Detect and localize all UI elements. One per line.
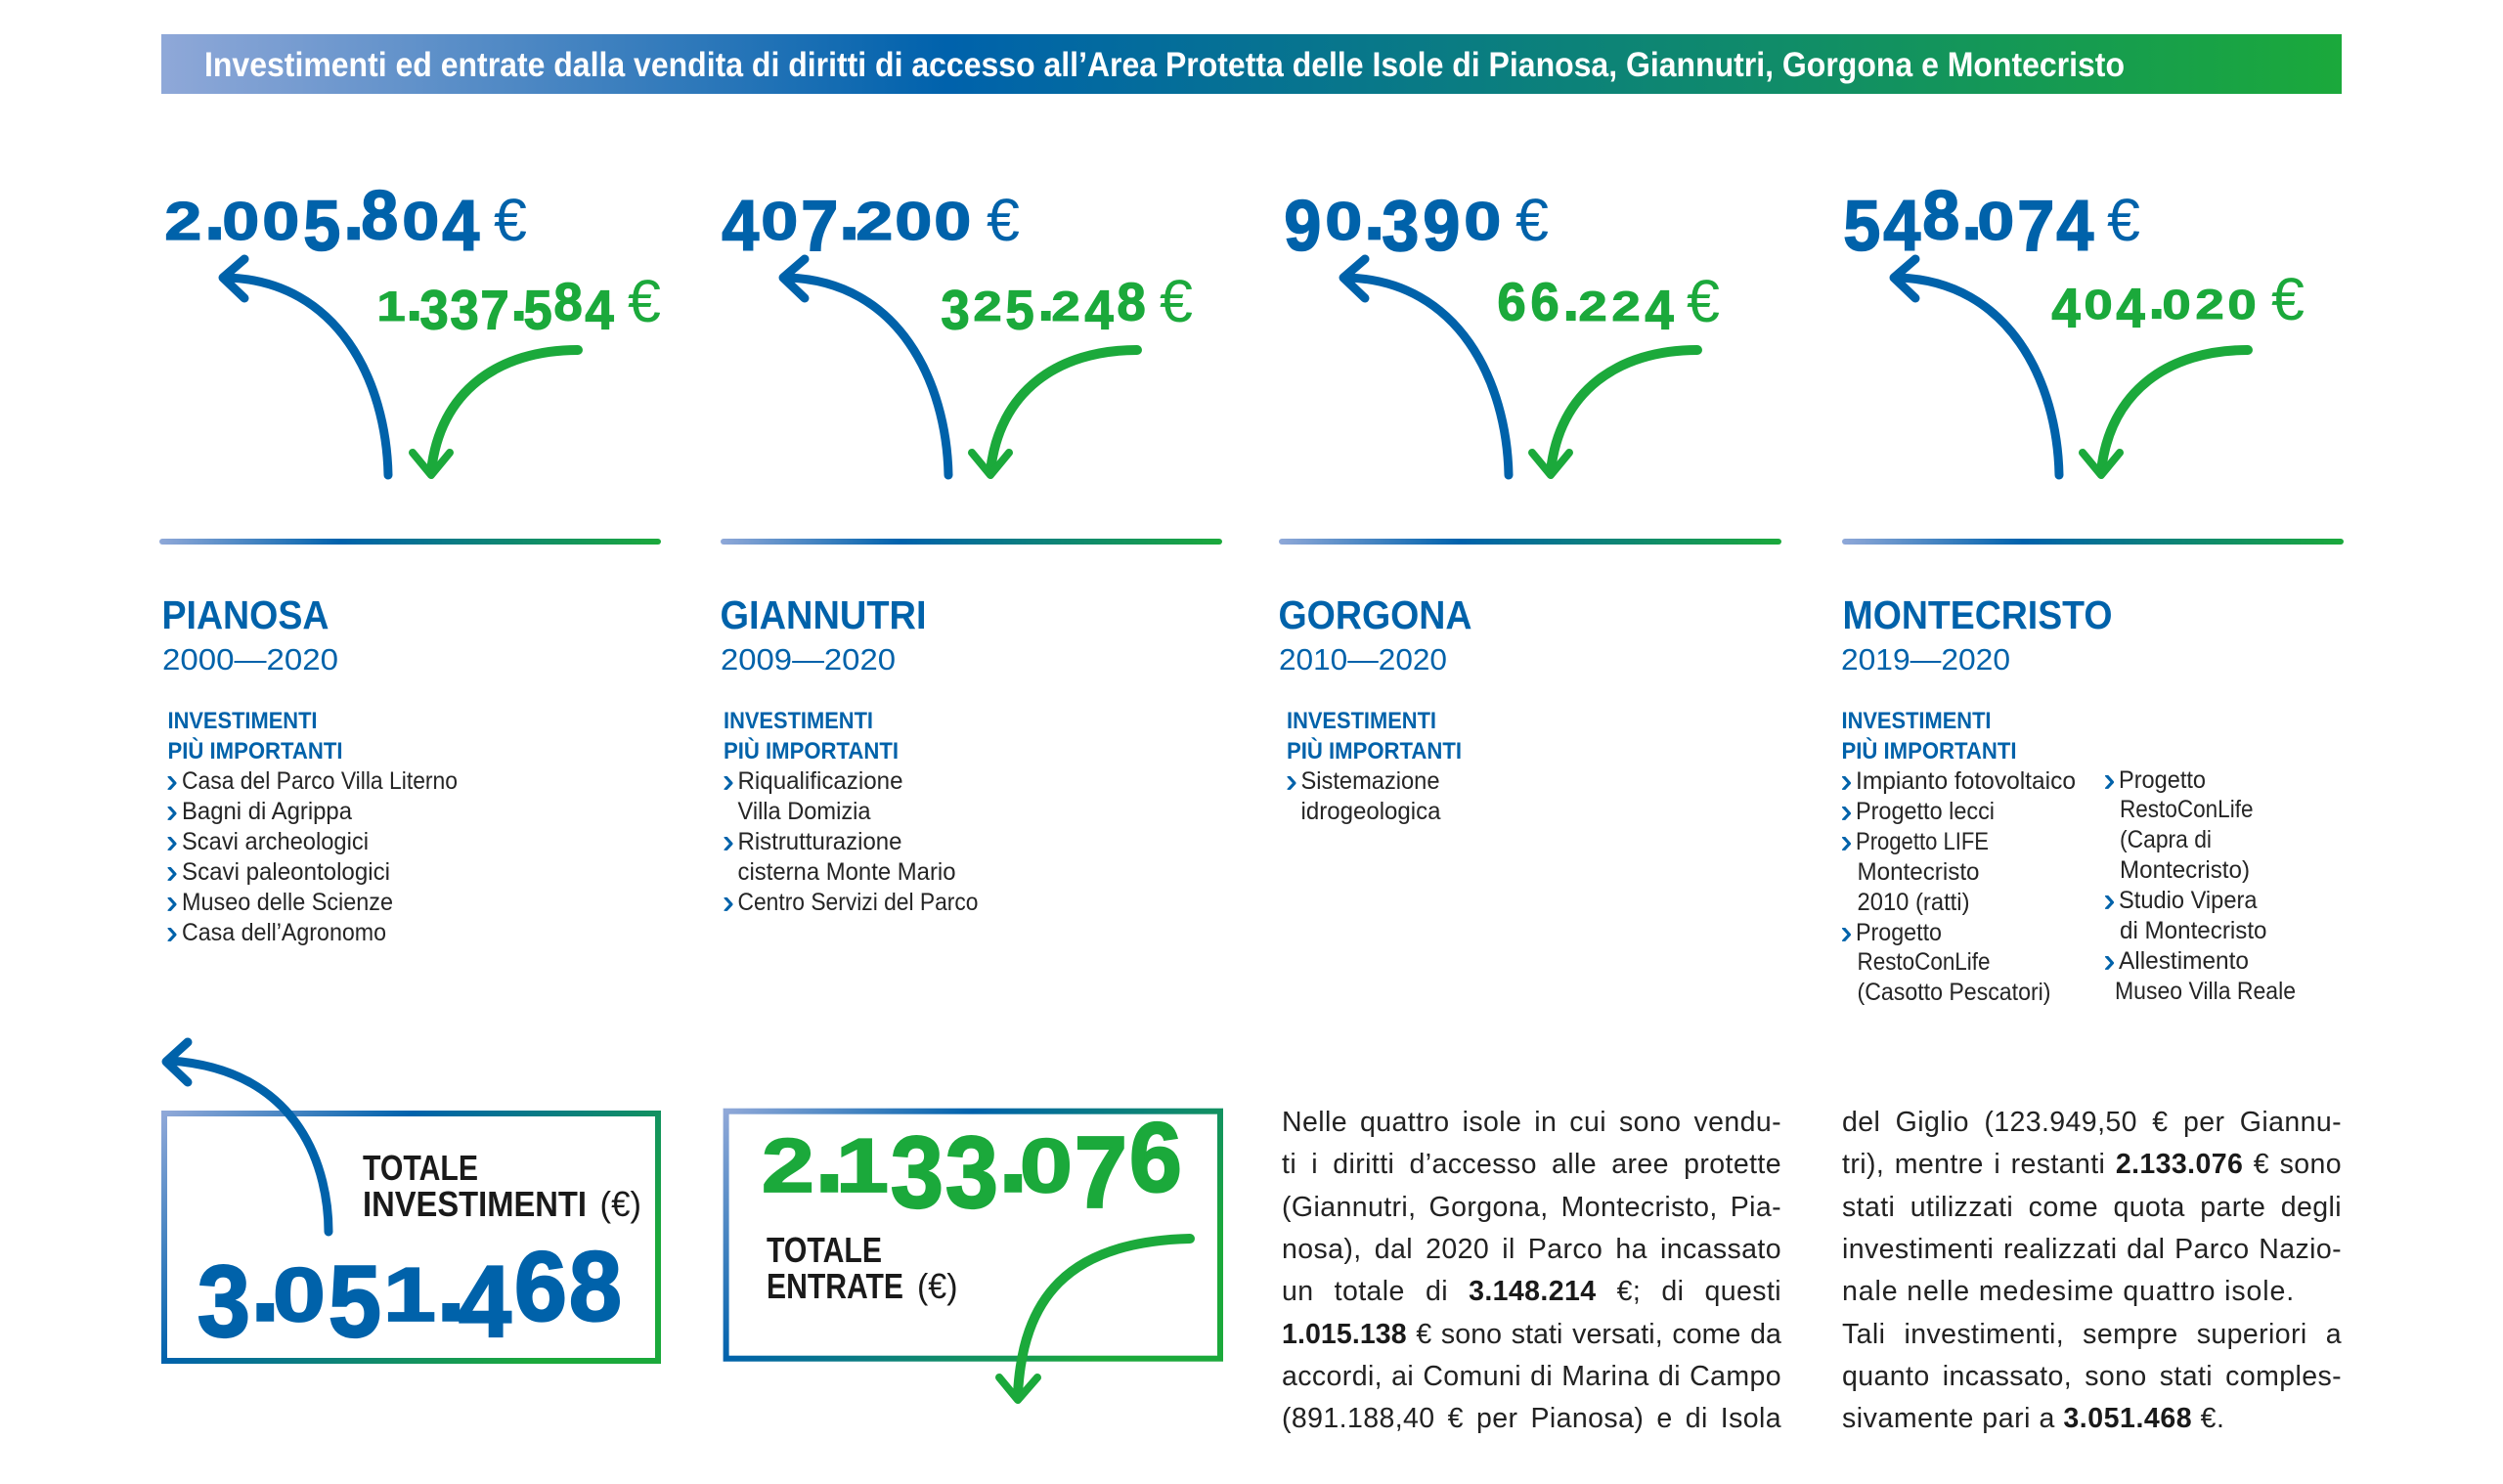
total revenue figure: 3 [945, 1117, 998, 1230]
island name: GIANNUTRI [720, 592, 927, 637]
revenue figure: 5 [523, 280, 552, 341]
years: 2009—2020 [721, 642, 896, 677]
total revenue figure [763, 1126, 1181, 1205]
revenue figure [2052, 266, 2305, 332]
years: 2019—2020 [1841, 642, 2010, 677]
investments figure [1844, 187, 2140, 253]
revenue figure: 8 [1117, 273, 1146, 332]
investments figure: 0 [263, 191, 300, 251]
investments figure: 7 [2017, 186, 2054, 266]
investment list: Impianto fotovoltaico [1856, 767, 2076, 795]
years: 2010—2020 [1279, 642, 1447, 677]
investments figure: 3 [1382, 186, 1419, 266]
revenue figure [1498, 268, 1720, 334]
investment list: › [1841, 763, 1852, 799]
revenue figure: 3 [419, 280, 448, 341]
investment list: › [166, 853, 178, 890]
total revenue figure: 0 [1020, 1124, 1073, 1209]
investment list: Scavi paleontologici [182, 858, 390, 886]
revenue figure: 2 [1578, 284, 1606, 329]
revenue figure: 2 [2195, 282, 2223, 327]
investment list: › [1841, 914, 1852, 950]
investments figure: 0 [1977, 191, 2015, 251]
investment list: (Capra di [2120, 826, 2212, 853]
revenue figure: 8 [554, 273, 583, 332]
text block: left column: accordi, ai Comuni di Marina di Campo [1282, 1361, 1781, 1392]
investment list: PIÙ IMPORTANTI [1842, 737, 2016, 764]
investments figure: 0 [222, 191, 259, 251]
investment list: › [724, 884, 733, 920]
investment list: INVESTIMENTI [724, 708, 873, 734]
arrow: investments [1894, 259, 2059, 475]
total investments figure: . [437, 1225, 466, 1344]
investments figure: 0 [1325, 191, 1362, 251]
investments figure [723, 187, 1020, 253]
investment list: INVESTIMENTI [168, 708, 317, 734]
revenue figure: . [2148, 267, 2165, 331]
investment list: Montecristo [1858, 858, 1979, 886]
text block: left column: 1.015.138 € sono stati versati, come da [1282, 1319, 1781, 1350]
total revenue figure: 6 [1129, 1104, 1182, 1213]
label: TOTALE [767, 1230, 882, 1270]
total investments figure: 4 [459, 1246, 511, 1359]
investments figure: 4 [1883, 186, 1920, 266]
investment list: Ristrutturazione [737, 828, 901, 855]
total revenue figure: 1 [836, 1124, 889, 1209]
investment list: Casa del Parco Villa Literno [182, 767, 458, 795]
investment list: Progetto [1856, 919, 1942, 946]
investment list: Progetto [2119, 766, 2206, 794]
box frame [726, 1112, 1220, 1359]
investments figure: . [1364, 171, 1385, 256]
investments figure: 0 [402, 191, 439, 251]
label: (€) [600, 1184, 641, 1224]
investments figure [165, 187, 527, 253]
investment list: Bagni di Agrippa [182, 798, 352, 825]
total revenue figure: 3 [891, 1117, 944, 1230]
investment list: Riqualificazione [737, 767, 903, 795]
island name: GORGONA [1279, 592, 1472, 637]
investment list: RestoConLife [1858, 948, 1991, 976]
arrow: total revenue [999, 1239, 1190, 1400]
investment list: Progetto lecci [1856, 798, 1995, 825]
total revenue figure: . [814, 1096, 844, 1215]
investments figure: 9 [1423, 186, 1460, 266]
revenue figure: € [1687, 268, 1720, 334]
total investments figure: . [251, 1225, 281, 1344]
investments figure: 0 [1464, 191, 1501, 251]
investment list [724, 708, 978, 920]
revenue figure: 3 [941, 280, 970, 341]
investment list: PIÙ IMPORTANTI [724, 737, 899, 764]
investments figure: € [494, 187, 527, 253]
investment list: › [2104, 942, 2115, 979]
revenue figure: 4 [1084, 280, 1113, 341]
revenue figure: 2 [1052, 284, 1080, 329]
revenue figure: 4 [1645, 280, 1674, 341]
divider [1279, 539, 1781, 545]
revenue figure: 5 [1006, 280, 1034, 341]
investment list [1287, 708, 1462, 825]
investments figure [1285, 187, 1549, 253]
investments figure: 7 [801, 186, 838, 266]
label [767, 1230, 958, 1306]
total revenue figure: 2 [762, 1124, 814, 1209]
investment list: Montecristo) [2120, 856, 2250, 884]
investment list: › [2104, 882, 2115, 918]
investments figure: 5 [1843, 186, 1880, 266]
text block: left column: nosa), dal 2020 il Parco ha incassato [1282, 1234, 1781, 1265]
investments figure: 0 [762, 191, 799, 251]
revenue figure: 2 [974, 284, 1002, 329]
investment list: Centro Servizi del Parco [737, 889, 978, 916]
text block: right column: quanto incassato, sono stati comples- [1842, 1361, 2342, 1392]
investments figure: 4 [2057, 186, 2094, 266]
investment list [1841, 708, 2296, 1006]
revenue figure: € [628, 268, 661, 334]
arrow: revenue [972, 350, 1137, 475]
revenue figure: 2 [1611, 284, 1641, 329]
investment list: PIÙ IMPORTANTI [168, 737, 342, 764]
revenue figure: € [2271, 266, 2305, 332]
revenue figure: 0 [2085, 282, 2113, 327]
investments figure: 4 [722, 186, 759, 266]
island name: PIANOSA [162, 592, 329, 637]
revenue figure [942, 268, 1193, 334]
box frame [164, 1113, 658, 1361]
revenue figure: 1 [376, 284, 406, 329]
investment list: Studio Vipera [2119, 887, 2258, 914]
total investments figure: 5 [328, 1246, 381, 1359]
revenue figure: 4 [2117, 278, 2145, 339]
label: (€) [917, 1266, 958, 1306]
total investments figure: 3 [198, 1246, 250, 1359]
text block: right column: tri), mentre i restanti 2.133.076 € sono [1842, 1149, 2342, 1180]
investment list: › [166, 914, 178, 950]
revenue figure: . [510, 269, 527, 333]
text block: right column: stati utilizzati come quota parte degli [1842, 1192, 2342, 1223]
investment list: › [724, 763, 733, 799]
investment list: › [1841, 793, 1852, 829]
label: ENTRATE [767, 1266, 903, 1306]
investment list: › [166, 763, 178, 799]
investment list: cisterna Monte Mario [737, 858, 956, 886]
investment list: › [2104, 762, 2115, 798]
label [363, 1148, 641, 1224]
revenue figure: 6 [1530, 273, 1559, 332]
investments figure: . [1961, 171, 1982, 256]
investment list: di Montecristo [2120, 917, 2266, 944]
investment list: Casa dell’Agronomo [182, 919, 386, 946]
island name: MONTECRISTO [1842, 592, 2112, 637]
revenue figure: 3 [450, 280, 479, 341]
investment list: › [166, 884, 178, 920]
text block: left column: un totale di 3.148.214 €; di questi [1282, 1276, 1781, 1307]
divider [721, 539, 1222, 545]
investments figure: 8 [361, 176, 398, 254]
arrow: investments [1343, 259, 1509, 475]
investments figure: 5 [303, 186, 340, 266]
divider [159, 539, 661, 545]
panel: Montecristo [1841, 171, 2344, 1006]
revenue figure: 7 [481, 280, 509, 341]
investment list: 2010 (ratti) [1858, 889, 1969, 916]
investments figure: € [987, 187, 1020, 253]
panel: Gorgona [1279, 171, 1781, 825]
text block: left column: Nelle quattro isole in cui sono vendu- [1282, 1107, 1781, 1138]
investment list: Allestimento [2119, 947, 2249, 975]
text block: left column: ti i diritti d’accesso alle aree protette [1282, 1149, 1781, 1180]
investments figure: 4 [443, 186, 480, 266]
arrow: revenue [1532, 350, 1697, 475]
investment list: PIÙ IMPORTANTI [1287, 737, 1462, 764]
revenue figure: 0 [2163, 282, 2191, 327]
text block: left column [1282, 1107, 1781, 1434]
investments figure: . [839, 171, 860, 256]
investments figure: 9 [1284, 186, 1321, 266]
text block: left column: (891.188,40 € per Pianosa) e di Isola [1282, 1403, 1781, 1434]
text block: right column: del Giglio (123.949,50 € per Giannu- [1842, 1107, 2342, 1138]
total investments figure: 1 [383, 1253, 436, 1338]
investment list: › [724, 823, 733, 859]
investment list: › [166, 823, 178, 859]
investment list [166, 708, 458, 950]
divider [1842, 539, 2344, 545]
investment list: Scavi archeologici [182, 828, 369, 855]
total investments figure: 6 [514, 1233, 567, 1342]
arrow: revenue [2083, 350, 2248, 475]
investment list: › [1841, 823, 1852, 859]
revenue figure: . [1563, 269, 1579, 333]
investment list: INVESTIMENTI [1842, 708, 1991, 734]
revenue figure: 4 [2051, 278, 2081, 339]
investments figure: . [204, 171, 225, 256]
total investments figure: 0 [273, 1253, 326, 1338]
investment list: Villa Domizia [737, 798, 871, 825]
investments figure: € [2107, 187, 2140, 253]
investments figure: 0 [935, 191, 972, 251]
investment list: RestoConLife [2120, 796, 2253, 823]
investments figure: 2 [164, 191, 201, 251]
title banner [161, 34, 2342, 94]
investments figure: . [343, 171, 364, 256]
text block: right column: nale nelle medesime quattro isole. [1842, 1276, 2295, 1307]
total investments figure: 8 [569, 1233, 622, 1342]
arrow: revenue [413, 350, 578, 475]
arrow: investments [223, 259, 388, 475]
label: INVESTIMENTI [363, 1184, 587, 1224]
total revenue figure: . [998, 1096, 1029, 1215]
text block: right column: Tali investimenti, sempre superiori a [1842, 1319, 2342, 1350]
text block: right column: investimenti realizzati dal Parco Nazio- [1842, 1234, 2342, 1265]
label: TOTALE [363, 1148, 478, 1188]
text block: right column [1842, 1107, 2342, 1434]
panel: Pianosa [159, 171, 661, 950]
investment list: idrogeologica [1300, 798, 1441, 825]
investments figure: € [1515, 187, 1549, 253]
total revenue figure: 7 [1075, 1117, 1127, 1230]
investment list: (Casotto Pescatori) [1858, 979, 2051, 1006]
panel: total revenue [724, 1096, 1223, 1404]
investment list: Sistemazione [1300, 767, 1439, 795]
text block: right column: sivamente pari a 3.051.468 €. [1842, 1403, 2224, 1434]
text block: left column: (Giannutri, Gorgona, Montecristo, Pia- [1282, 1192, 1781, 1223]
investments figure: 2 [856, 191, 893, 251]
panel: total investments [161, 1038, 661, 1364]
revenue figure: € [1160, 268, 1193, 334]
revenue figure: 6 [1497, 273, 1526, 332]
investment list: Progetto LIFE [1856, 828, 1989, 855]
years: 2000—2020 [162, 642, 338, 677]
investments figure: 8 [1922, 176, 1959, 254]
revenue figure [377, 268, 661, 334]
revenue figure: . [1037, 269, 1054, 333]
revenue figure: 0 [2227, 282, 2257, 327]
investment list: Museo Villa Reale [2115, 978, 2296, 1005]
revenue figure: . [407, 269, 422, 333]
investment list: Museo delle Scienze [182, 889, 393, 916]
investments figure: 0 [895, 191, 932, 251]
arrow: total investments [166, 1042, 329, 1232]
investment list: › [1287, 763, 1296, 799]
revenue figure: 4 [585, 280, 614, 341]
total investments figure [198, 1255, 621, 1334]
title banner: Investimenti ed entrate dalla vendita di diritti di accesso all’Area Protetta delle Isole di Pianosa, Giannutri, Gorgona e Montecristo [204, 46, 2125, 84]
panel: Giannutri [720, 171, 1222, 920]
investment list: › [166, 793, 178, 829]
arrow: investments [783, 259, 948, 475]
investment list: INVESTIMENTI [1287, 708, 1436, 734]
